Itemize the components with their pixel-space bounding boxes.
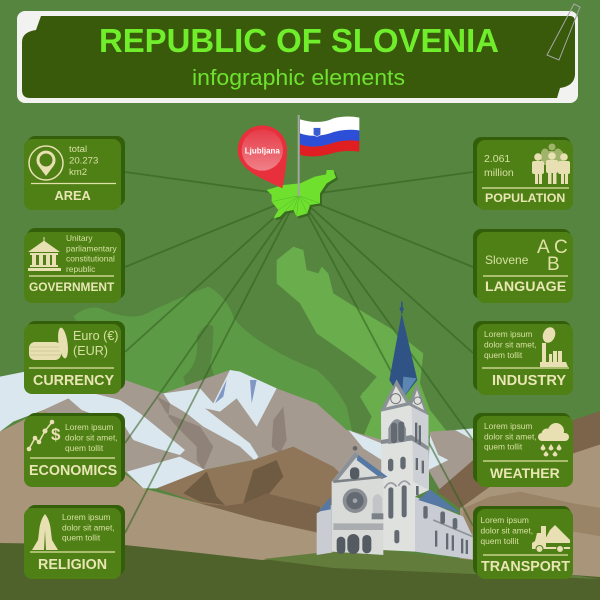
- right mountains: [428, 410, 600, 580]
- panel: area: [24, 136, 125, 210]
- left aisle: [317, 505, 332, 555]
- text: industry: Lorem ipsum: [484, 329, 532, 339]
- label: population: POPULATION: [485, 191, 565, 205]
- text: economics: Lorem ipsum: [65, 422, 113, 432]
- text: transport: dolor sit amet,: [480, 526, 533, 536]
- panel: language: [473, 229, 573, 303]
- text: economics: dolor sit amet,: [65, 432, 118, 442]
- text: area value: km2: [69, 167, 87, 178]
- left and centre mountains: [0, 370, 383, 573]
- icon: factory: [540, 325, 568, 367]
- tower windows: [388, 419, 406, 444]
- connector rays: [125, 172, 473, 533]
- icon: coins: [29, 327, 70, 360]
- text: industry: dolor sit amet,: [484, 340, 537, 350]
- icon: location pin: [29, 146, 63, 180]
- label: economics: ECONOMICS: [29, 463, 117, 479]
- icon: government building: [28, 237, 61, 271]
- panel: population: [473, 137, 573, 210]
- text: weather: dolor sit amet,: [484, 432, 537, 442]
- panel: industry: [473, 321, 573, 395]
- label: weather: WEATHER: [490, 465, 560, 481]
- icon: growth chart and dollar: $: [51, 425, 61, 444]
- label: transport: TRANSPORT: [481, 559, 570, 575]
- text: government value: parliamentary: [66, 244, 118, 254]
- text: area value: 20.273: [69, 156, 98, 166]
- ground: [0, 543, 600, 600]
- icon: praying hands: [32, 514, 58, 550]
- text: population value: million: [484, 167, 514, 179]
- flag pole: [298, 115, 300, 196]
- panel: economics: [24, 413, 125, 487]
- icon: rain cloud: [538, 423, 569, 456]
- subtitle: infographic elements: [192, 65, 405, 90]
- text: currency value: Euro (€): [73, 329, 118, 343]
- panel: religion: [24, 505, 125, 579]
- map: [267, 170, 336, 218]
- tower: [381, 405, 429, 552]
- label: currency: CURRENCY: [33, 373, 114, 389]
- text: weather: quem tollit: [484, 442, 523, 452]
- text: area value: total: [69, 144, 87, 155]
- text: government value: Unitary: [66, 233, 93, 243]
- label: area: AREA: [54, 188, 91, 203]
- label: government: GOVERNMENT: [29, 280, 115, 294]
- nave windows: [423, 506, 428, 519]
- flag: [300, 116, 359, 156]
- text: religion: quem tollit: [62, 532, 101, 542]
- label: religion: RELIGION: [38, 557, 107, 573]
- icon: people: [532, 144, 570, 184]
- text: transport: quem tollit: [480, 536, 519, 546]
- text: religion: dolor sit amet,: [62, 522, 115, 532]
- nave right: [415, 497, 473, 559]
- spire: [389, 313, 417, 400]
- tower gables: [380, 379, 411, 412]
- panel: government: [24, 228, 125, 303]
- green mountains: [73, 247, 448, 440]
- panel: currency: [24, 321, 125, 394]
- text: government value: constitutional: [66, 254, 115, 264]
- text: government value: republic: [66, 264, 95, 274]
- text: currency value: (EUR): [73, 344, 108, 358]
- church: [317, 302, 473, 559]
- map of Slovenia with flag and pin: [238, 115, 359, 220]
- text: economics: quem tollit: [65, 443, 104, 453]
- label: language: LANGUAGE: [485, 279, 566, 295]
- map shadow: [269, 172, 338, 220]
- icon: dump truck: [532, 525, 570, 552]
- landscape: [0, 247, 600, 600]
- panel: transport: [473, 506, 573, 579]
- icon: letters: A: [537, 237, 550, 258]
- icon: paper clip: [547, 4, 580, 60]
- text: religion: Lorem ipsum: [62, 512, 110, 522]
- title: REPUBLIC OF SLOVENIA: [99, 22, 499, 59]
- text: industry: quem tollit: [484, 350, 523, 360]
- icon: letters: C: [554, 237, 568, 258]
- text: language value: Slovene: [485, 253, 529, 267]
- text: transport: Lorem ipsum: [480, 515, 529, 525]
- label: industry: INDUSTRY: [492, 373, 566, 389]
- text: population value: 2.061: [484, 153, 510, 165]
- pin: Ljubljana: Ljubljana: [245, 147, 280, 156]
- panel: weather: [473, 413, 573, 487]
- text: weather: Lorem ipsum: [484, 421, 532, 431]
- front gable: [332, 452, 383, 555]
- title banner: [17, 4, 580, 103]
- icon: letters: B: [547, 254, 560, 275]
